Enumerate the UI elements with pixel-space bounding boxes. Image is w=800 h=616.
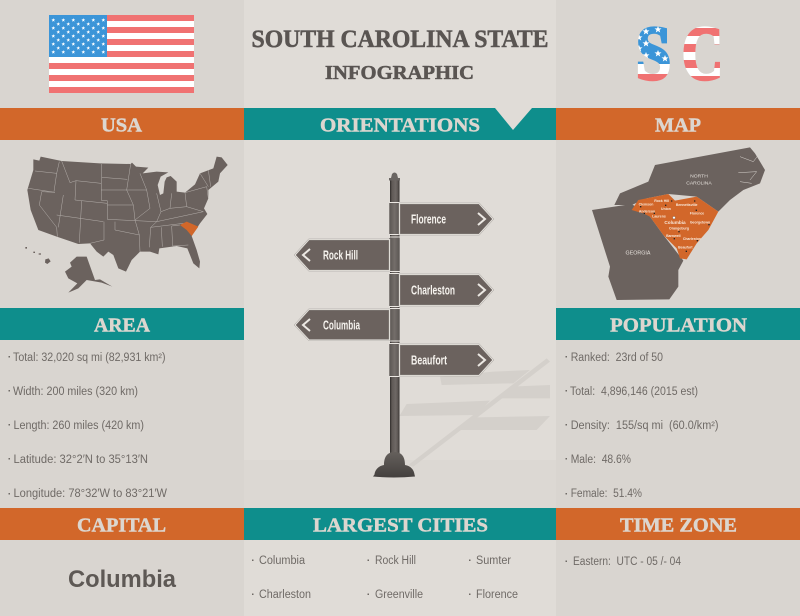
signpost xyxy=(295,172,493,478)
icon: SC flag-patterned letters xyxy=(636,12,723,96)
icon: USA flag xyxy=(49,15,194,93)
map labels: Georgetown xyxy=(690,220,710,224)
map labels: CAROLINA xyxy=(686,180,712,186)
USA map xyxy=(25,157,228,293)
title: INFOGRAPHIC xyxy=(325,62,474,84)
text block: population facts: Male: 48.6% xyxy=(571,454,631,466)
text block: population facts: Female: 51.4% xyxy=(571,488,642,500)
text block: largest cities: Sumter xyxy=(476,555,511,567)
regional map of South Carolina xyxy=(592,147,765,300)
map labels: Anderson xyxy=(639,209,655,213)
South Carolina xyxy=(632,194,718,259)
text block: population facts: Ranked: 23rd of 50 xyxy=(571,352,663,364)
text block: population facts: Density: 155/sq mi (60.0/km²) xyxy=(571,420,719,432)
map labels: GEORGIA xyxy=(626,251,651,257)
map labels: Rock Hill xyxy=(654,199,669,203)
header: CAPITAL: CAPITAL xyxy=(77,514,166,536)
sign: Charleston: Charleston xyxy=(411,282,455,298)
text block: largest cities xyxy=(252,555,518,601)
text block: largest cities: Greenville xyxy=(375,589,423,601)
North Carolina xyxy=(614,147,765,212)
header: CAPITAL xyxy=(0,508,244,540)
text: capital name: Columbia xyxy=(68,566,177,593)
map labels: Columbia xyxy=(664,220,686,225)
text block: largest cities: Columbia xyxy=(259,555,306,567)
header: ORIENTATIONS: ORIENTATIONS xyxy=(320,114,480,136)
header: LARGEST CITIES xyxy=(244,508,556,540)
sign: Rock Hill xyxy=(295,240,390,270)
text block: time zone: Eastern: UTC - 05 /- 04 xyxy=(573,556,682,568)
header: MAP xyxy=(556,108,800,140)
title xyxy=(252,26,548,84)
map labels: NORTH xyxy=(690,173,708,179)
panel: right column background xyxy=(556,0,800,616)
header: TIME ZONE xyxy=(556,508,800,540)
header: USA xyxy=(0,108,244,140)
sign: Charleston xyxy=(400,274,493,306)
map labels: Bennettsville xyxy=(676,203,698,207)
map labels: Union xyxy=(661,207,671,211)
sign: Columbia xyxy=(295,310,390,340)
map labels: Barnwell xyxy=(666,234,681,238)
text block: area facts: Width: 200 miles (320 km) xyxy=(13,386,138,398)
header: POPULATION xyxy=(556,308,800,340)
header: ORIENTATIONS xyxy=(244,108,556,140)
text block: largest cities: Charleston xyxy=(259,589,311,601)
Alaska xyxy=(65,257,112,293)
sign: Florence: Florence xyxy=(411,212,446,226)
header: POPULATION: POPULATION xyxy=(610,314,747,336)
Georgia xyxy=(592,204,683,300)
text block: population facts: Total: 4,896,146 (2015 est) xyxy=(570,386,698,398)
pole cap xyxy=(389,172,400,180)
header: AREA xyxy=(0,308,244,340)
pole sleeves xyxy=(389,203,400,376)
header: TIME ZONE: TIME ZONE xyxy=(620,514,737,536)
text block: area facts: Length: 260 miles (420 km) xyxy=(14,420,144,432)
map labels: Orangeburg xyxy=(669,227,689,231)
icon: SC flag-patterned letters: C xyxy=(682,12,723,96)
signpost shadow xyxy=(399,358,550,467)
header: USA: USA xyxy=(101,114,142,136)
base xyxy=(373,452,415,478)
sign: Columbia: Columbia xyxy=(323,318,360,332)
panel: center column background xyxy=(244,0,556,616)
Hawaii xyxy=(25,247,51,264)
title: SOUTH CAROLINA STATE xyxy=(252,26,548,53)
panel: left column background xyxy=(0,0,244,616)
South Carolina highlight xyxy=(180,222,198,236)
map labels xyxy=(626,173,712,257)
header: LARGEST CITIES: LARGEST CITIES xyxy=(313,514,488,536)
text block: area facts: Longitude: 78°32′W to 83°21′W xyxy=(14,488,167,500)
text block: area facts xyxy=(8,352,167,500)
coast detail xyxy=(738,155,758,183)
pole xyxy=(390,178,400,462)
header: AREA: AREA xyxy=(94,314,150,336)
pole rings xyxy=(389,202,400,376)
icon: SC flag-patterned letters: S xyxy=(636,12,671,96)
sign: Beaufort xyxy=(400,344,493,376)
text block: largest cities: Rock Hill xyxy=(375,555,416,567)
state boundary lines xyxy=(28,161,211,252)
sign: Rock Hill: Rock Hill xyxy=(323,248,358,262)
map labels: Clemson xyxy=(639,202,653,206)
text block: area facts: Latitude: 32°2′N to 35°13′N xyxy=(14,454,148,466)
map labels: Charleston xyxy=(683,237,701,241)
map labels: Beaufort xyxy=(678,246,693,250)
map labels: Florence xyxy=(690,211,704,215)
text block: largest cities: Florence xyxy=(476,589,518,601)
floor band under signpost xyxy=(244,460,556,508)
text block: area facts: Total: 32,020 sq mi (82,931 km²) xyxy=(13,352,166,364)
map labels: Laurens xyxy=(652,215,666,219)
header: MAP: MAP xyxy=(655,114,701,136)
sign: Beaufort: Beaufort xyxy=(411,352,447,368)
text block: population facts xyxy=(566,352,719,500)
sign: Florence xyxy=(400,204,493,234)
